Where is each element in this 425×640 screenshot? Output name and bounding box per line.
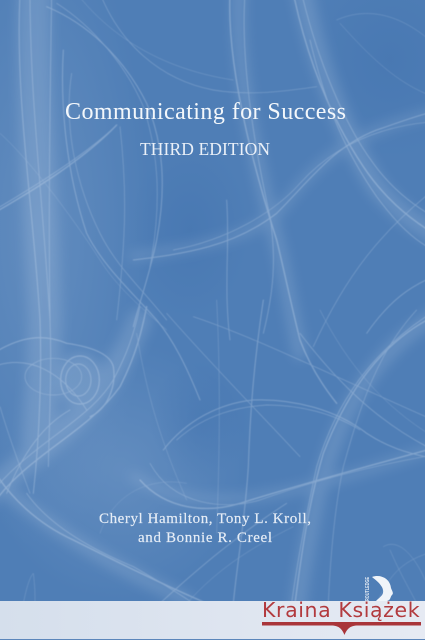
- bookseller logo: [262, 598, 421, 635]
- bottom left swirl: [0, 338, 114, 417]
- bottom band: [0, 601, 425, 640]
- right bottom: [295, 317, 425, 603]
- title: Communicating for Success: [65, 99, 346, 125]
- authors: and Bonnie R. Creel: [138, 530, 272, 546]
- top centre: [100, 0, 317, 93]
- publisher logo: [365, 576, 393, 601]
- publisher logo: ROUTLEDGE: [365, 577, 371, 601]
- bottom centre: [140, 448, 425, 508]
- authors: [99, 511, 311, 546]
- bookseller logo: Kraina Książek: [262, 598, 420, 622]
- left arcs: [0, 125, 117, 213]
- right bundles: [293, 0, 425, 233]
- authors: Cheryl Hamilton, Tony L. Kroll,: [99, 511, 311, 527]
- edition: THIRD EDITION: [140, 139, 270, 159]
